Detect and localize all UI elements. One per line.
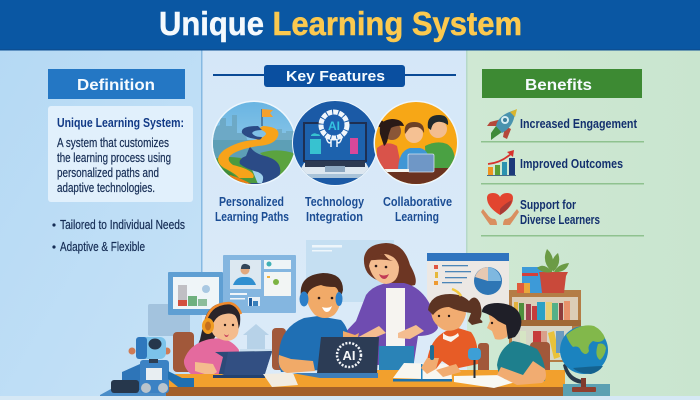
panel: key features [210,65,462,224]
definition text card [48,106,193,202]
icon: winding path [212,100,294,186]
title: Unique Learning System [159,5,522,42]
globe [560,325,608,392]
icon: growth chart [487,150,516,176]
boy with headphones [278,273,359,373]
panel: benefits [481,69,644,236]
notebook and paper [263,363,516,388]
label: collaborative learning: Collaborative [383,194,452,209]
bullet: tailored: Tailored to Individual Needs [60,217,185,232]
teacher [334,243,438,370]
definition heading [48,69,185,99]
benefits heading: Benefits [525,77,592,94]
girl writing [421,289,482,377]
key features heading [213,65,456,87]
label: personalized learning paths: Learning Paths [215,209,289,224]
classroom illustration [100,240,610,396]
label: technology integration [305,194,365,224]
boy reading [482,303,546,385]
bottom strip [0,396,700,400]
key features heading: Key Features [286,68,385,85]
label: collaborative learning [383,194,452,224]
label: collaborative learning: Learning [395,209,439,224]
data pie chart screen [427,253,509,309]
label: personalized learning paths [215,194,289,224]
label: technology integration: Technology [305,194,365,209]
title banner [0,0,700,50]
benefit: support for diverse learners: Diverse Learners [520,212,600,227]
laptop with AI logo [292,337,379,378]
definition text card: adaptive technologies. [57,180,155,195]
bookshelf with plant and box [509,249,581,362]
girl with headphones [184,303,272,377]
definition text card: Unique Learning System: [57,115,184,130]
icon: technology laptop: AI [328,119,340,133]
definition text card: A system that customizes [57,135,169,150]
faded background screens [148,240,394,355]
panel: left background [0,50,202,400]
definition text card: personalized paths and [57,165,159,180]
icon: rocket [487,109,517,140]
benefit: increased engagement: Increased Engagement [520,116,638,131]
tablet on desk [213,352,272,378]
benefits heading [482,69,642,98]
desk [100,370,610,396]
label: personalized learning paths: Personalized [219,194,284,209]
profile dashboard screen [223,255,296,313]
robot [111,337,194,393]
icon: collaboration group [374,100,458,186]
definition heading: Definition [77,77,155,94]
benefit: support for diverse learners: Support for [520,197,576,212]
panel: middle background [202,50,467,400]
laptop with AI logo: AI [342,348,356,363]
label: technology integration: Integration [306,209,363,224]
panel: definition [48,69,193,254]
definition text card: the learning process using [57,150,171,165]
chairs [173,328,550,386]
icon: technology laptop [292,100,378,186]
left chart screen [168,272,223,315]
microphone [468,348,481,378]
bullet: adaptive: Adaptive & Flexible [60,239,145,254]
panel: right background [467,50,700,400]
benefit: improved outcomes: Improved Outcomes [520,156,623,171]
icon: heart in hands [481,193,519,225]
benefit: support for diverse learners [520,197,600,227]
